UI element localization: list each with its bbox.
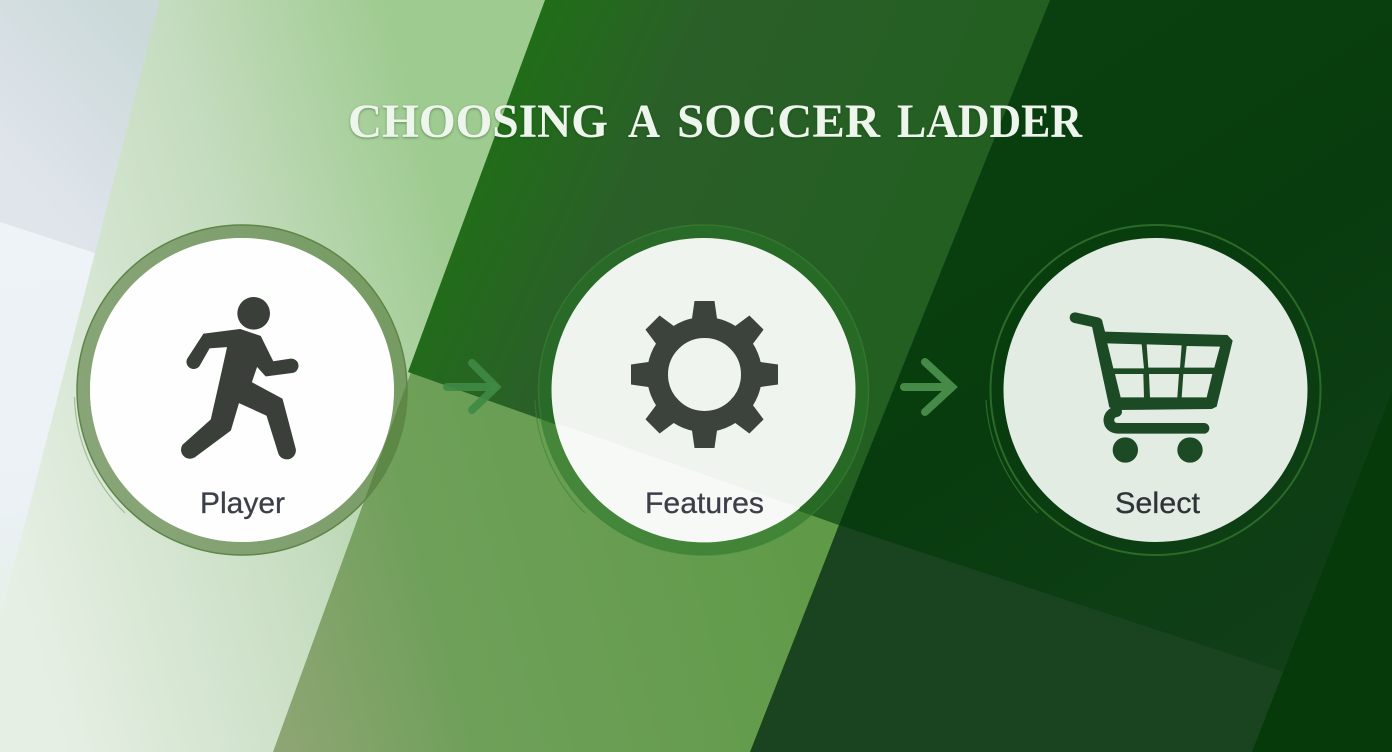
- step 1: player circle: [74, 225, 407, 555]
- label: Player: [200, 487, 285, 520]
- step 2: features circle: [535, 225, 868, 555]
- ring: [990, 225, 1320, 555]
- title: [348, 95, 1083, 148]
- label: Features: [645, 487, 764, 520]
- step 3: select circle: [986, 225, 1320, 555]
- arrow: features to select: [904, 362, 952, 412]
- disc: [552, 238, 856, 542]
- arrow: player to features: [447, 363, 496, 410]
- title: SOCCER: [677, 95, 881, 148]
- title: A: [628, 95, 660, 148]
- icon: gear: [631, 301, 778, 448]
- ring: [84, 232, 400, 548]
- icon: shopping cart: [1075, 318, 1233, 463]
- basket cells: [1107, 343, 1220, 397]
- ring: [545, 232, 862, 548]
- label: Select: [1115, 487, 1201, 520]
- icon: running player: [182, 297, 298, 458]
- disc: [1004, 238, 1308, 542]
- title: LADDER: [897, 95, 1083, 148]
- title: CHOOSING: [348, 95, 608, 148]
- disc: [90, 238, 394, 542]
